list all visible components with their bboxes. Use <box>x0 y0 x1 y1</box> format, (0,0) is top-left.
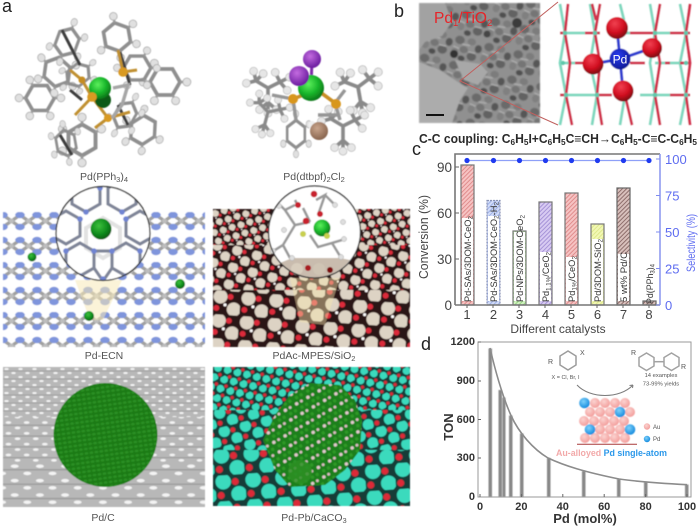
y axis labels <box>451 336 475 503</box>
reaction conditions text: X = Cl, Br, I <box>552 375 580 381</box>
axes frame <box>478 342 691 497</box>
x axis labels: 0 <box>477 501 483 513</box>
TEM label: 1 <box>453 18 458 29</box>
caption: Pd(PPh3)4: 4 <box>124 175 128 184</box>
TEM label: /TiO <box>458 10 487 27</box>
reaction equation: 5 <box>692 137 697 147</box>
caption: Pd(dtbpf)2Cl2: Cl <box>331 171 341 183</box>
x axis labels: 1 <box>463 307 471 322</box>
left axis labels: 60 <box>437 206 452 221</box>
x axis labels: 7 <box>620 307 627 322</box>
molecule: Pd(dtbpf)2Cl2 <box>238 50 389 158</box>
reactant labels: X <box>580 350 585 357</box>
bars and rotated catalyst labels: Pd-NPs/3DOM-CeO <box>515 216 526 302</box>
inset: reaction scheme <box>548 350 686 458</box>
chart c: conversion and selectivity <box>417 152 698 336</box>
x axis labels: 4 <box>542 307 549 322</box>
caption: PdAc-MPES/SiO2: 2 <box>351 354 355 363</box>
legend: Au <box>653 425 660 431</box>
bars and rotated catalyst labels: 2 <box>546 252 552 255</box>
left axis labels: 30 <box>437 252 452 267</box>
product labels <box>631 350 686 371</box>
molecule: Pd(PPh3)4 <box>15 9 191 168</box>
reaction equation: 6 <box>548 137 552 147</box>
x axis labels <box>463 307 653 322</box>
yield text: 73-99% yields <box>643 382 679 388</box>
x axis labels: 8 <box>645 307 653 322</box>
y axis title: TON <box>441 413 456 441</box>
bars and rotated catalyst labels: Pd <box>541 290 552 302</box>
reaction equation: H <box>515 132 524 146</box>
caption: Pd(PPh3)4: Pd(PPh <box>80 171 116 183</box>
reaction equation: 5 <box>561 137 566 147</box>
x axis labels: 6 <box>594 307 601 322</box>
y axis labels: 600 <box>457 414 475 426</box>
panel: Pd-ECN <box>3 180 205 347</box>
reaction equation: 6 <box>511 137 515 147</box>
reaction equation: 5 <box>633 137 638 147</box>
reaction equation: C≡CH→C <box>566 132 620 146</box>
x axis labels: 60 <box>598 501 610 513</box>
TON fit curve <box>490 348 687 485</box>
reaction equation: 6 <box>620 137 625 147</box>
y axis labels: 1200 <box>451 336 475 348</box>
reactant ring <box>560 351 576 370</box>
y axis labels: 900 <box>457 375 475 387</box>
bars and rotated catalyst labels: 4 <box>650 264 656 267</box>
x axis labels: 2 <box>490 307 497 322</box>
bars and rotated catalyst labels: -H <box>489 205 500 215</box>
x axis labels: 80 <box>639 501 652 513</box>
y axis labels: 300 <box>457 452 475 464</box>
reactant labels <box>548 350 585 366</box>
panel label c: c <box>412 139 421 159</box>
zoom wedge lines <box>460 2 558 125</box>
chart d: TON vs Pd <box>441 336 696 526</box>
inset title: Au-alloyed Pd single-atom <box>556 448 667 458</box>
y axis labels: 0 <box>469 491 475 503</box>
bars and rotated catalyst labels: 2 <box>598 239 604 243</box>
reaction equation: -C≡C-C <box>638 132 679 146</box>
right axis labels <box>665 152 687 313</box>
left axis labels: 0 <box>444 298 452 313</box>
reaction equation: C-C coupling: C <box>419 132 513 146</box>
x axis labels: 20 <box>515 501 528 513</box>
reaction equation: H <box>684 132 692 146</box>
panel label b: b <box>394 1 404 21</box>
caption: Pd(dtbpf)2Cl2: 2 <box>341 175 345 184</box>
legend: Pd <box>653 437 660 443</box>
reaction equation: I+C <box>528 132 548 146</box>
panel b: TEM image <box>419 3 540 123</box>
bars and rotated catalyst labels: 2 <box>520 215 526 219</box>
panel: PdAc-MPES/SiO2 <box>213 186 410 347</box>
magnifier lens: PdAc <box>268 186 360 278</box>
right axis labels: 25 <box>665 262 679 276</box>
bars and rotated catalyst labels: 1.1% <box>546 276 552 291</box>
right axis title: Selectivity (%) <box>684 214 698 272</box>
caption: Pd-Pb/CaCO3: 3 <box>343 516 347 525</box>
bars and rotated catalyst labels <box>461 165 656 305</box>
left axis title: Conversion (%) <box>417 195 431 279</box>
caption: Pd(dtbpf)2Cl2: Pd(dtbpf) <box>283 171 326 183</box>
x axis title: Pd (mol%) <box>553 511 617 526</box>
right axis labels: 100 <box>665 152 687 167</box>
left axis labels <box>437 160 452 313</box>
yield text <box>643 373 679 388</box>
bars and rotated catalyst labels: Pd-SAs/3DOM-CeO <box>489 217 500 302</box>
caption: Pd-ECN: Pd-ECN <box>85 350 123 362</box>
panel label d: d <box>421 334 431 354</box>
reaction equation: 6 <box>679 137 684 147</box>
x axis title: Different catalysts <box>510 322 606 336</box>
caption: PdAc-MPES/SiO2: PdAc-MPES/SiO <box>273 350 351 362</box>
product labels: R <box>681 364 686 371</box>
x axis labels: 3 <box>516 307 523 322</box>
panel: Pd/C <box>3 367 205 507</box>
Pd nanoparticle <box>54 383 158 487</box>
bars and rotated catalyst labels: 3 <box>650 270 656 274</box>
yield text: 14 examples <box>645 373 678 379</box>
product labels: R <box>631 350 636 357</box>
atom label Pd: Pd <box>613 52 627 66</box>
bars and rotated catalyst labels: 2 <box>494 215 500 219</box>
reaction equation: 5 <box>524 137 529 147</box>
reactant labels: R <box>548 359 553 366</box>
Pd atoms on ECN <box>28 252 185 321</box>
Pd-Pb nanoparticle <box>263 383 362 487</box>
right axis labels: 75 <box>665 188 679 204</box>
right axis labels: 0 <box>665 298 672 313</box>
caption: Pd(PPh3)4: 3 <box>116 175 120 184</box>
reaction equation: H <box>552 132 561 146</box>
product rings <box>639 353 679 370</box>
x axis labels: 100 <box>678 501 696 513</box>
panel: Pd-Pb/CaCO3 <box>213 367 410 506</box>
reaction arrow <box>577 385 633 396</box>
selectivity line <box>464 158 652 163</box>
bars and rotated catalyst labels: Pd(PPh <box>645 271 656 304</box>
bars and rotated catalyst labels: Pd/3DOM-SiO <box>593 241 604 302</box>
caption: Pd/C: Pd/C <box>91 512 115 524</box>
bars and rotated catalyst labels: Pd-SAs/3DOM-CeO <box>463 217 474 302</box>
legend <box>644 423 660 443</box>
Au-Pd surface atoms <box>579 398 635 443</box>
x axis labels: 5 <box>568 307 575 322</box>
bars and rotated catalyst labels: /CeO <box>541 255 552 277</box>
panel b: atomic structure <box>559 4 690 125</box>
caption: Pd(dtbpf)2Cl2: 2 <box>326 175 331 184</box>
bars and rotated catalyst labels: 2 <box>468 216 474 220</box>
bars and rotated catalyst labels: 1% <box>572 281 578 291</box>
caption: Pd-Pb/CaCO3: Pd-Pb/CaCO <box>281 512 343 524</box>
bars and rotated catalyst labels: ) <box>645 267 656 270</box>
reaction equation: H <box>624 132 633 146</box>
TON bars <box>488 348 688 497</box>
axes frame <box>455 154 660 305</box>
TEM label: 2 <box>487 18 492 29</box>
surface base line <box>577 443 637 445</box>
x axis labels <box>477 501 696 513</box>
TEM scale bar <box>426 114 444 116</box>
bars and rotated catalyst labels: /CeO <box>567 260 578 281</box>
bars and rotated catalyst labels: Pd <box>567 290 578 302</box>
x axis labels: 40 <box>557 501 569 513</box>
caption: Pd(PPh3)4: ) <box>120 171 124 183</box>
bars and rotated catalyst labels: 2 <box>572 256 578 260</box>
magnifier lens: ECN <box>54 185 152 282</box>
bars and rotated catalyst labels: 5 wt% Pd/C <box>619 252 630 302</box>
left axis labels: 90 <box>437 160 452 175</box>
bars and rotated catalyst labels: 2 <box>494 202 500 206</box>
TEM label: Pd <box>434 10 453 27</box>
right axis labels: 50 <box>665 225 679 240</box>
